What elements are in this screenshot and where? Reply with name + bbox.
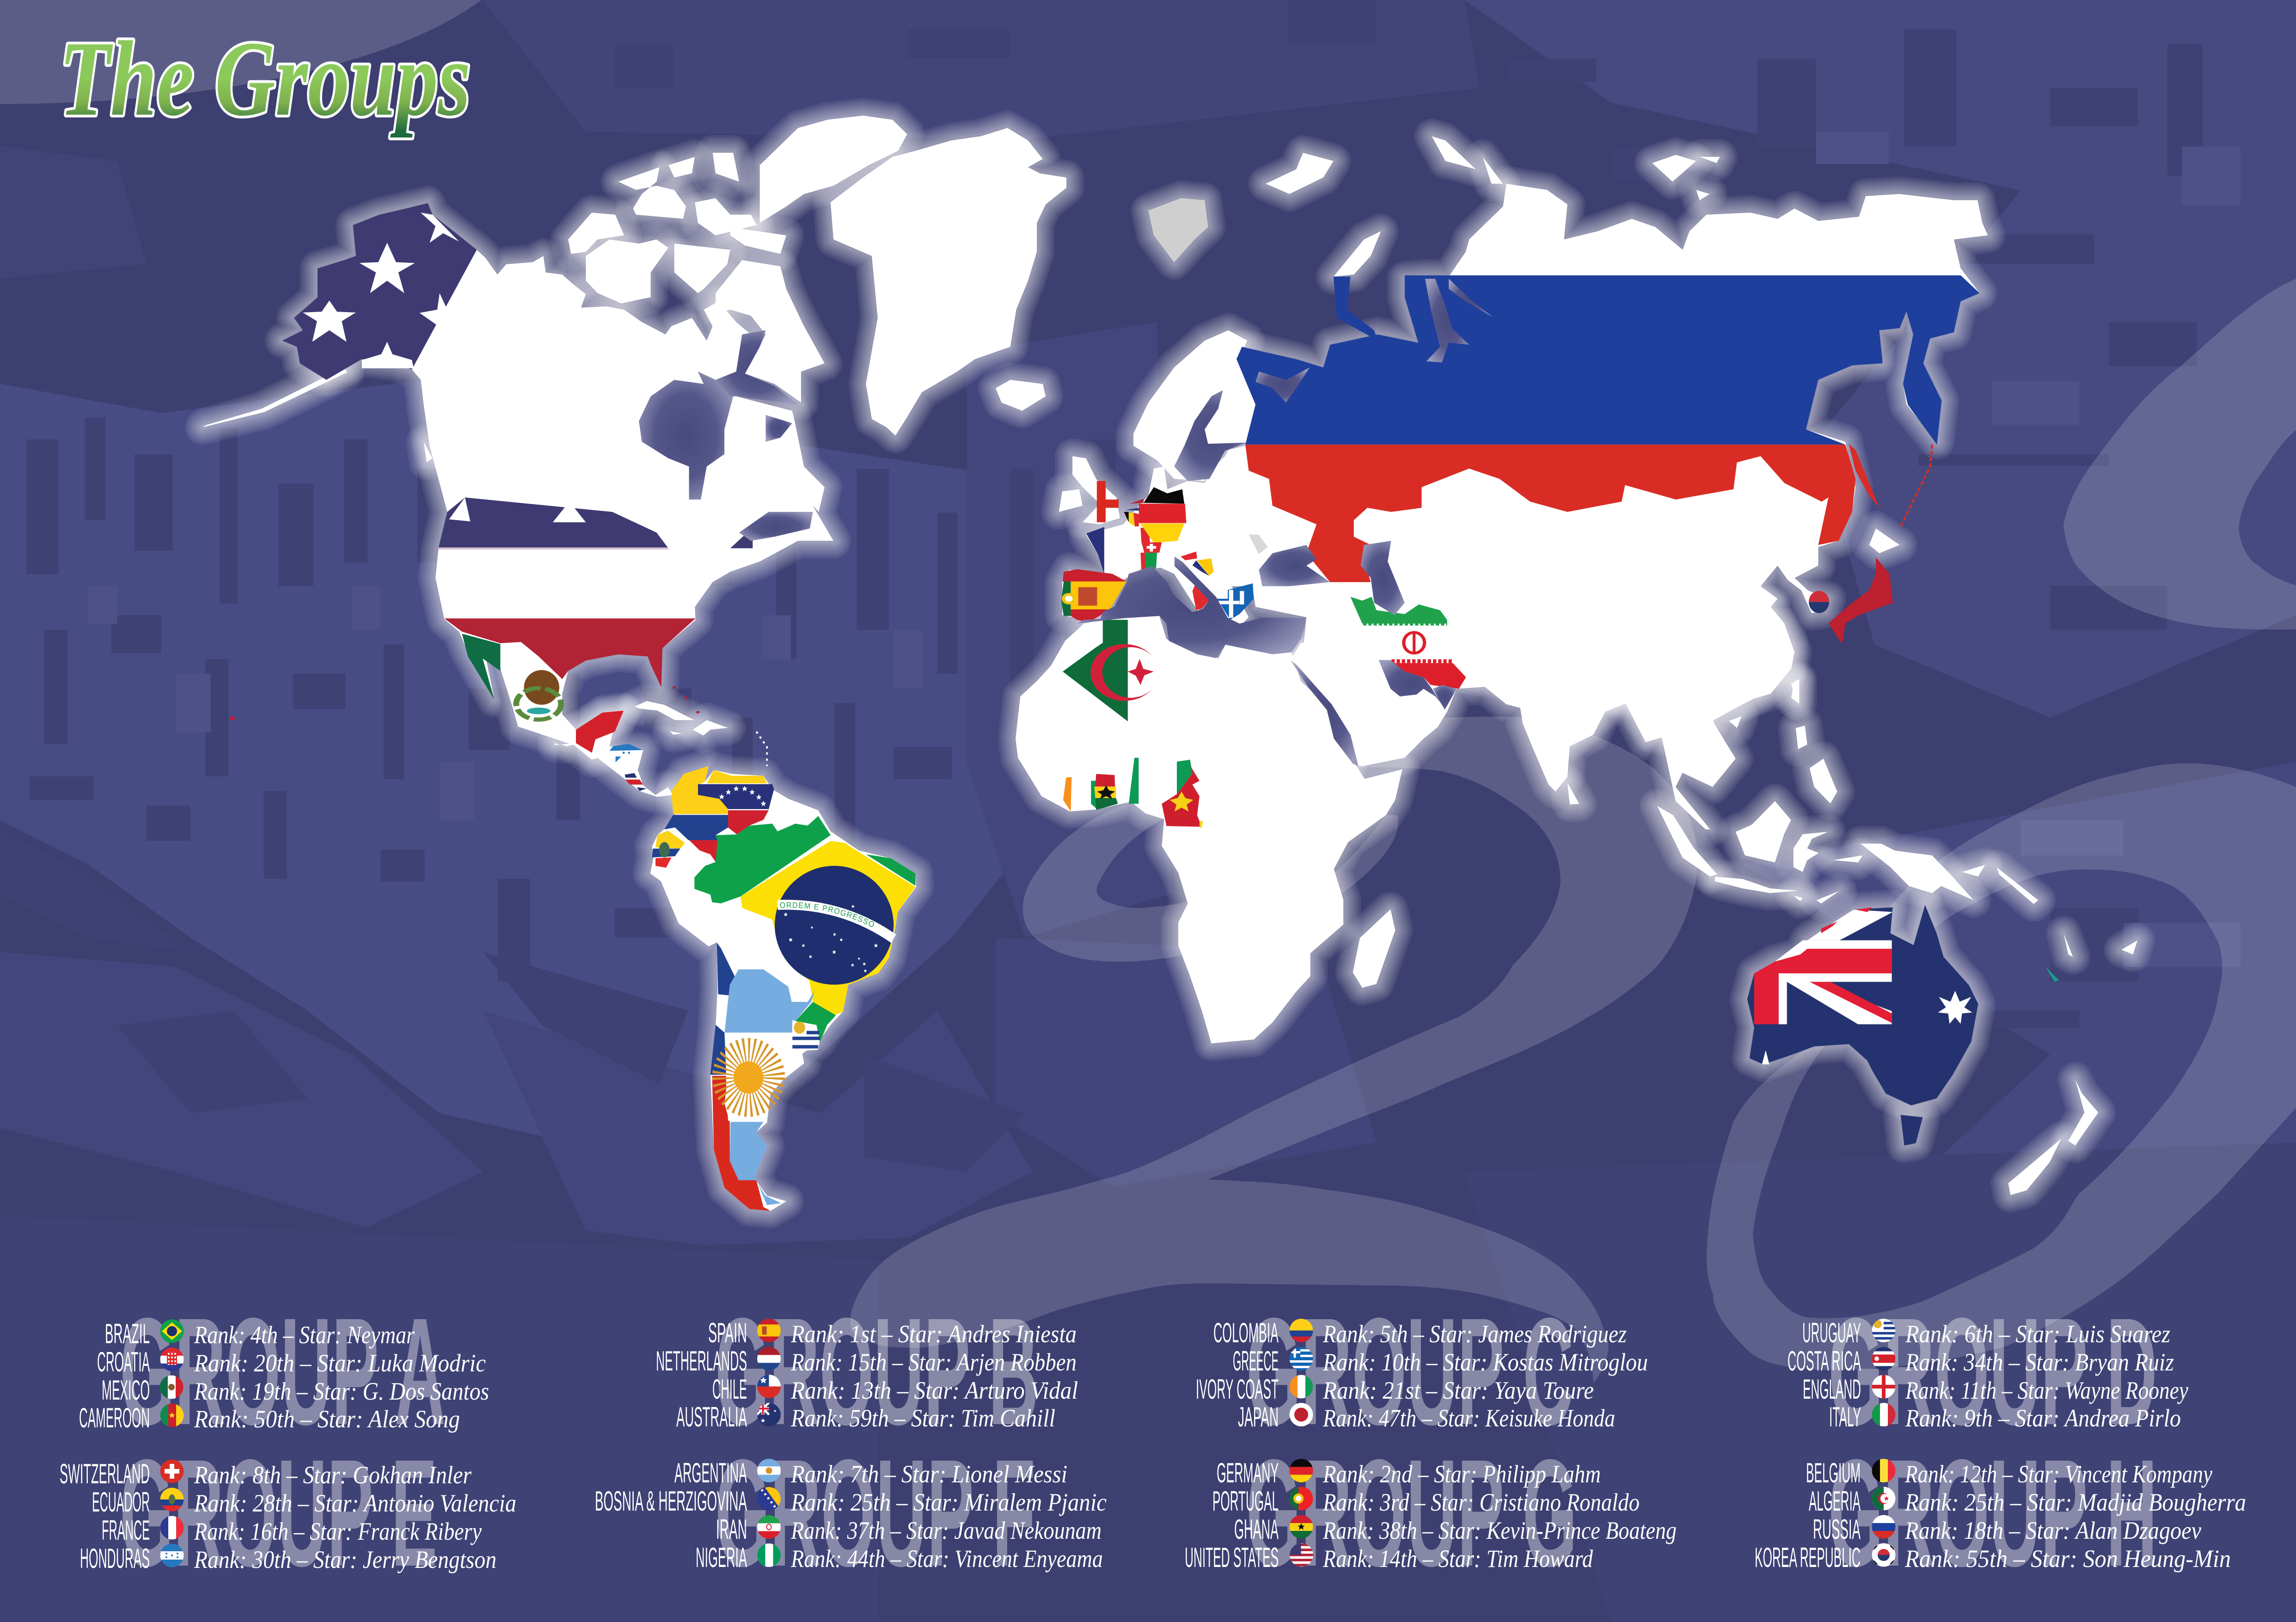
flag: Greece (1217, 584, 1254, 620)
row: Argentina: ARGENTINA (674, 1457, 747, 1488)
row: United States: Rank: 14th – Star: Tim Howard (1322, 1545, 1593, 1573)
row: Cameroon: CAMEROON (79, 1402, 150, 1433)
text: GROUP B (715, 1286, 1039, 1456)
big translucent swirl: right upper curl (2063, 279, 2296, 630)
flag: Ecuador (652, 830, 685, 868)
row: Spain: SPAIN (708, 1317, 747, 1348)
row: Netherlands: NETHERLANDS (656, 1346, 747, 1376)
text: GROUP C (1246, 1286, 1574, 1456)
flags: Nigeria and Cameroon (1129, 758, 1203, 828)
row: Russia (1813, 1514, 2201, 1545)
flags: Spain and Portugal (1061, 569, 1130, 622)
flags: Ivory Coast and Ghana (1063, 774, 1118, 811)
row: Colombia: COLOMBIA (1213, 1317, 1279, 1348)
row: Belgium (1806, 1457, 2212, 1488)
white glow around the land (202, 116, 2137, 1211)
row: Nigeria: NIGERIA (696, 1542, 747, 1573)
row: Honduras: Rank: 30th – Star: Jerry Bengtson (194, 1546, 496, 1573)
row: Bosnia and Herzegovina: BOSNIA & HERZIGOVINA (595, 1486, 747, 1517)
row: Costa Rica (1788, 1346, 2174, 1376)
row: Bosnia and Herzegovina: Rank: 25th – Star: Miralem Pjanic (790, 1488, 1107, 1516)
row: Italy: Rank: 9th – Star: Andrea Pirlo (1905, 1404, 2181, 1432)
flag: Australia (1747, 905, 1978, 1146)
row: Ecuador (92, 1487, 516, 1518)
flag: Uruguay (792, 1020, 820, 1051)
text: GROUP F (715, 1427, 1035, 1598)
flag: Mexico (462, 634, 561, 719)
land details: Svalbard, Moldova, New Caledonia, Antilles (756, 198, 2059, 982)
flag: Iran (1350, 597, 1466, 689)
row: Brazil (105, 1318, 415, 1349)
row: Costa Rica: COSTA RICA (1788, 1346, 1861, 1376)
row: Cameroon (79, 1402, 460, 1433)
flag: Germany (1139, 487, 1186, 543)
text: GROUP G (1246, 1427, 1577, 1598)
row: Argentina: Rank: 7th – Star: Lionel Messi (790, 1460, 1067, 1488)
row: Bosnia and Herzegovina (595, 1486, 1107, 1517)
row: England: Rank: 11th – Star: Wayne Rooney (1905, 1376, 2188, 1404)
flag: England (1097, 481, 1119, 522)
row: Cameroon: Rank: 50th – Star: Alex Song (194, 1405, 460, 1433)
inland seas: Hudson Bay, Black Sea, Caspian, Baltic, Mediterranean, Red Sea, Persian Gulf (639, 279, 1493, 766)
row: Germany (1217, 1457, 1601, 1488)
flags: Mexico red, Honduras and Costa Rica (576, 711, 647, 791)
row: Greece (1233, 1346, 1648, 1376)
row: Korea Republic (1755, 1542, 2231, 1573)
row: Chile (712, 1374, 1078, 1405)
row: Switzerland: SWITZERLAND (60, 1458, 150, 1489)
row: Ivory Coast (1196, 1374, 1594, 1405)
row: Spain (708, 1317, 1077, 1348)
land: South America (650, 766, 916, 1211)
row: Greece: GREECE (1233, 1346, 1279, 1376)
row: Ivory Coast: Rank: 21st – Star: Yaya Toure (1322, 1376, 1594, 1404)
row: Belgium: BELGIUM (1806, 1457, 1861, 1488)
text: GROUP E (120, 1427, 437, 1598)
flag: Chile (710, 942, 771, 1211)
world map land (202, 116, 2137, 1211)
row: Colombia (1213, 1317, 1627, 1348)
flag: Brazil: ORDEM E PROGRESSO (779, 901, 876, 930)
row: Brazil: BRAZIL (105, 1318, 150, 1349)
row: Ivory Coast: IVORY COAST (1196, 1374, 1279, 1405)
row: Algeria: Rank: 25th – Star: Madjid Bougherra (1904, 1488, 2246, 1516)
row: Korea Republic: KOREA REPUBLIC (1755, 1542, 1861, 1573)
row: Chile: CHILE (712, 1374, 747, 1405)
row: Nigeria: Rank: 44th – Star: Vincent Enyeama (790, 1545, 1103, 1573)
land: Central America and Caribbean (555, 701, 728, 797)
row: Spain: Rank: 1st – Star: Andres Iniesta (790, 1320, 1077, 1348)
flag: Argentina (723, 969, 814, 1205)
row: France: Rank: 16th – Star: Franck Ribery (194, 1518, 482, 1545)
row: Mexico: MEXICO (102, 1375, 150, 1406)
row: Japan: Rank: 47th – Star: Keisuke Honda (1322, 1404, 1615, 1432)
row: Colombia: Rank: 5th – Star: James Rodriguez (1322, 1320, 1627, 1348)
land: North America, Greenland and Arctic islands (202, 116, 1066, 760)
row: Algeria (1809, 1486, 2246, 1517)
row: Russia: Rank: 18th – Star: Alan Dzagoev (1904, 1517, 2201, 1544)
row: Costa Rica: Rank: 34th – Star: Bryan Ruiz (1905, 1348, 2174, 1376)
row: Australia: Rank: 59th – Star: Tim Cahill (790, 1404, 1055, 1432)
row: Italy: ITALY (1829, 1401, 1861, 1432)
row: Korea Republic: Rank: 55th – Star: Son Heung-Min (1904, 1545, 2231, 1573)
row: Netherlands (656, 1346, 1077, 1376)
row: Australia: AUSTRALIA (676, 1401, 747, 1432)
row: England: ENGLAND (1803, 1374, 1861, 1405)
flags: Switzerland and Italy (1141, 542, 1209, 610)
flags: Russia (1237, 276, 1980, 582)
row: Algeria: ALGERIA (1809, 1486, 1861, 1517)
row: Honduras: HONDURAS (80, 1543, 150, 1574)
flag: Colombia (664, 766, 728, 862)
row: Uruguay: URUGUAY (1802, 1317, 1861, 1348)
row: Mexico (102, 1375, 489, 1406)
row: Croatia (97, 1346, 486, 1377)
row: United States: UNITED STATES (1185, 1542, 1279, 1573)
row: Portugal (1212, 1486, 1640, 1517)
row: Argentina (674, 1457, 1067, 1488)
row: France: FRANCE (102, 1515, 150, 1546)
row: Italy (1829, 1401, 2181, 1432)
big translucent swirl: central figure 2 (851, 717, 1698, 1383)
land: Middle East and South Asia (1292, 643, 1664, 805)
row: Ghana: GHANA (1234, 1514, 1279, 1545)
flag: United States over Alaska and contiguous states (229, 203, 753, 720)
row: Switzerland (60, 1458, 472, 1489)
flag: France (1086, 527, 1150, 574)
row: Nigeria (696, 1542, 1103, 1573)
row: Mexico: Rank: 19th – Star: G. Dos Santos (194, 1377, 489, 1405)
row: Croatia: Rank: 20th – Star: Luka Modric (194, 1349, 486, 1377)
row: Iran: Rank: 37th – Star: Javad Nekounam (790, 1517, 1102, 1544)
row: Japan: JAPAN (1238, 1401, 1279, 1432)
flag: Algeria (1063, 620, 1154, 721)
row: Honduras (80, 1543, 496, 1574)
land: Eurasia, Scandinavia and islands (1059, 136, 1988, 723)
row: Portugal: Rank: 3rd – Star: Cristiano Ronaldo (1322, 1488, 1640, 1516)
row: Uruguay (1802, 1317, 2170, 1348)
row: Germany: Rank: 2nd – Star: Philipp Lahm (1322, 1460, 1601, 1488)
row: Belgium: Rank: 12th – Star: Vincent Kompany (1904, 1460, 2212, 1488)
flags: Japan and Korea Republic (1809, 557, 1893, 644)
row: Croatia: CROATIA (97, 1346, 150, 1377)
row: Germany: GERMANY (1217, 1457, 1279, 1488)
row: Ecuador: Rank: 28th – Star: Antonio Valencia (194, 1489, 516, 1517)
row: Ecuador: ECUADOR (92, 1487, 150, 1518)
big translucent swirl: top left (0, 0, 481, 104)
flag: Brazil (694, 816, 916, 1042)
row: Ghana (1234, 1514, 1677, 1545)
big translucent swirl: right lower loop (1707, 763, 2296, 1370)
title: The Groups: The Groups (59, 19, 471, 138)
flag: Venezuela (698, 770, 774, 835)
row: Russia: RUSSIA (1813, 1514, 1861, 1545)
row: United States (1185, 1542, 1593, 1573)
row: Netherlands: Rank: 15th – Star: Arjen Robben (790, 1348, 1077, 1376)
row: England (1803, 1374, 2188, 1405)
land: East and Southeast Asia, Oceania islands (1572, 556, 2137, 1195)
flags: Croatia and Bosnia (1181, 552, 1214, 576)
row: Greece: Rank: 10th – Star: Kostas Mitroglou (1322, 1348, 1648, 1376)
row: Australia (676, 1401, 1055, 1432)
flags: Belgium and Netherlands (1124, 499, 1144, 526)
row: Iran: IRAN (716, 1514, 747, 1545)
land: Africa and Madagascar (1016, 616, 1402, 1044)
row: Japan (1238, 1401, 1615, 1432)
row: Portugal: PORTUGAL (1212, 1486, 1279, 1517)
row: Ghana: Rank: 38th – Star: Kevin-Prince Boateng (1322, 1517, 1677, 1544)
row: Iran (716, 1514, 1102, 1545)
row: Uruguay: Rank: 6th – Star: Luis Suarez (1905, 1320, 2170, 1348)
row: Brazil: Rank: 4th – Star: Neymar (194, 1321, 415, 1349)
row: France (102, 1515, 482, 1546)
row: Chile: Rank: 13th – Star: Arturo Vidal (790, 1376, 1078, 1404)
text: GROUP A (120, 1286, 446, 1456)
row: Switzerland: Rank: 8th – Star: Gokhan Inler (194, 1461, 472, 1489)
